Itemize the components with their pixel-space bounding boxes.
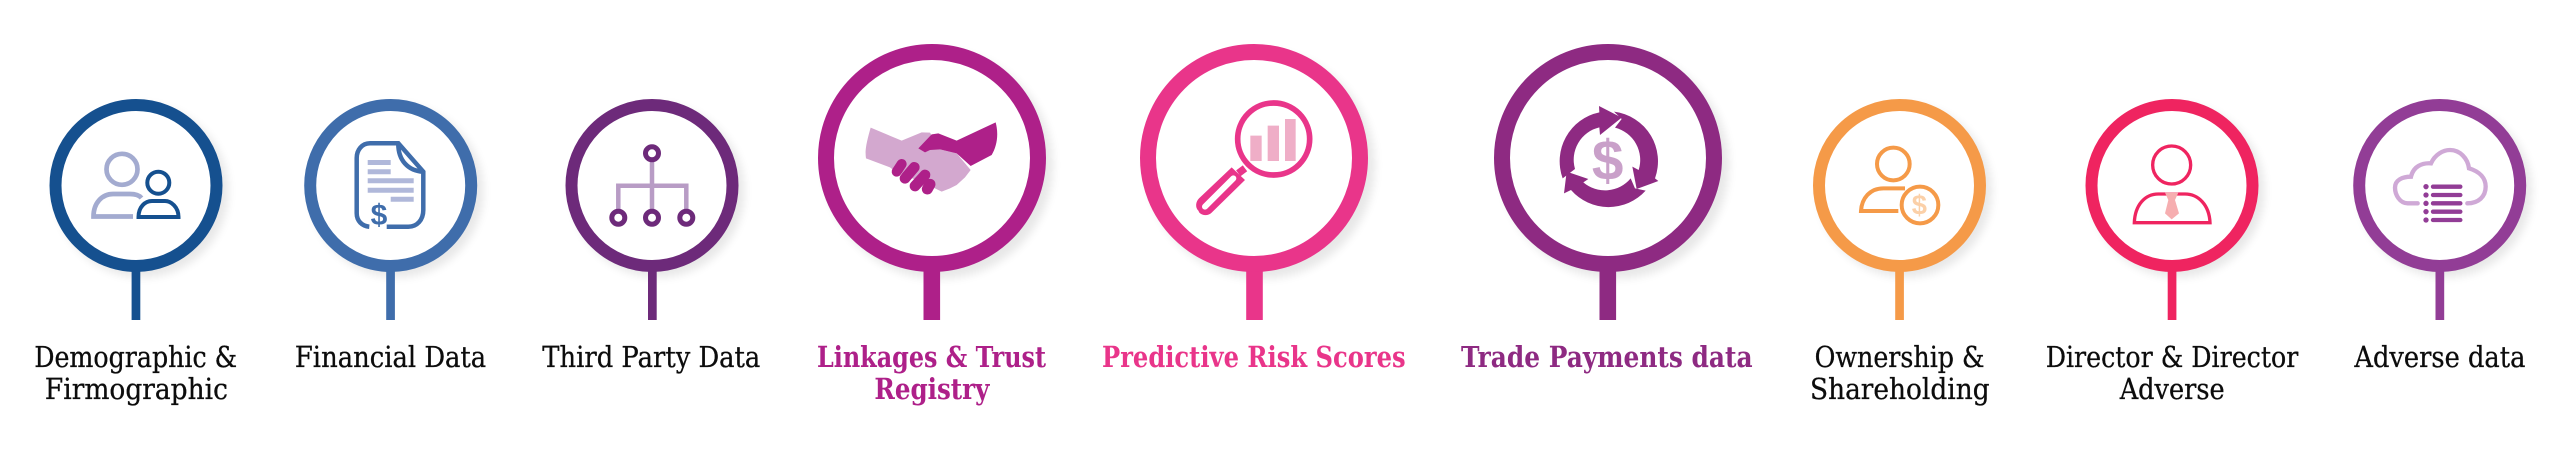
label bbox=[34, 340, 237, 406]
label: Financial Data bbox=[295, 340, 486, 374]
icon: person with coin bbox=[1861, 148, 1938, 223]
icon: document with dollar bbox=[357, 143, 423, 232]
label bbox=[1810, 340, 1990, 406]
item: Financial Data bbox=[295, 104, 486, 374]
label bbox=[817, 340, 1046, 406]
label: Firmographic bbox=[45, 372, 228, 406]
item: Trade Payments data bbox=[1461, 51, 1753, 374]
label: Linkages & Trust bbox=[817, 340, 1046, 374]
item: Adverse data bbox=[2354, 104, 2532, 374]
ring bbox=[572, 105, 732, 266]
item: Demographic & Firmographic bbox=[34, 104, 237, 406]
ring bbox=[56, 105, 216, 266]
label: Shareholding bbox=[1810, 372, 1990, 406]
label: Ownership & bbox=[1815, 340, 1985, 374]
icon: two people bbox=[94, 154, 178, 217]
item: Director & Director Adverse bbox=[2046, 104, 2298, 406]
ring bbox=[2359, 105, 2520, 266]
icon: magnifier with bars bbox=[1196, 103, 1310, 215]
ring bbox=[1819, 105, 1980, 266]
icon: cycling arrows with dollar bbox=[1560, 106, 1658, 207]
label: Demographic & bbox=[34, 340, 237, 374]
icon: person with tie bbox=[2134, 146, 2210, 223]
label: Predictive Risk Scores bbox=[1102, 340, 1406, 374]
item: Third Party Data bbox=[542, 104, 760, 374]
item: Linkages & Trust Registry bbox=[817, 51, 1053, 406]
ring bbox=[2092, 105, 2252, 266]
label: Trade Payments data bbox=[1461, 340, 1753, 374]
ring bbox=[826, 52, 1038, 264]
icon: cycling arrows with dollar: $ bbox=[1592, 130, 1623, 193]
label: Adverse data bbox=[2354, 340, 2525, 374]
icon: handshake bbox=[866, 122, 997, 192]
ring bbox=[1148, 52, 1360, 264]
item: Ownership & Shareholding bbox=[1810, 104, 1992, 406]
item: Predictive Risk Scores bbox=[1102, 51, 1406, 374]
label: Registry bbox=[874, 372, 990, 406]
ring bbox=[1502, 52, 1714, 264]
icon: hierarchy bbox=[612, 147, 693, 224]
icon: cloud with server rows bbox=[2395, 150, 2486, 223]
label bbox=[2046, 340, 2298, 406]
icon: document with dollar: $ bbox=[371, 199, 388, 232]
icon: person with coin: $ bbox=[1912, 190, 1927, 221]
ring bbox=[310, 105, 471, 266]
label: Third Party Data bbox=[542, 340, 760, 374]
label: Adverse bbox=[2119, 372, 2225, 406]
label: Director & Director bbox=[2046, 340, 2298, 374]
